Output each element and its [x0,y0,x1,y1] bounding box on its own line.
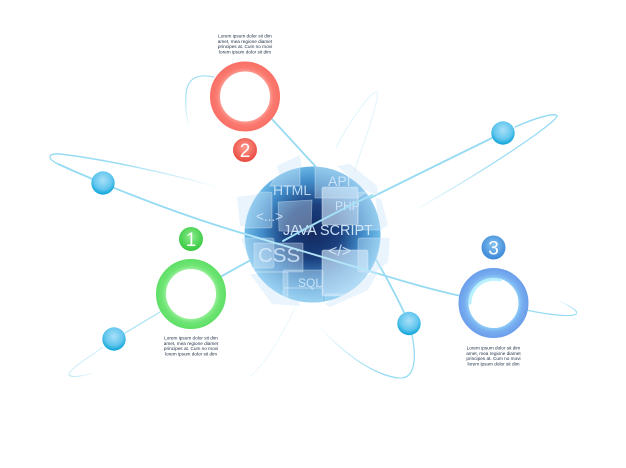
text block: 2: Lorem ipsum dolor sit dim [218,34,272,38]
badge: 2 [233,138,257,162]
text block: 3: amet, mea regione diamet [466,351,521,356]
orbit: faint upper ellipse [336,92,377,172]
text block: 2: lorem ipsum dolor sit dim [219,50,271,54]
globe sphere [244,166,380,302]
globe outer translucent shards [237,155,390,307]
orbit: left ellipse through globe to blue ring [50,154,577,316]
text block: 1: lorem ipsum dolor sit dim [165,352,217,356]
orbit: lines across globe front [245,195,375,273]
text block: 3 [466,346,521,366]
text block: 2: principes at. Cum no movi [218,44,272,49]
ring: green [161,264,221,324]
globe labels: SQL [298,276,322,290]
infographic [50,34,577,378]
orbit: faint lower ellipse [250,308,295,376]
globe [237,155,390,307]
text block: 1: Lorem ipsum dolor sit dim [164,336,218,340]
node: lower left [102,327,126,351]
globe labels: HTML [273,182,311,198]
globe labels: CSS [258,244,300,267]
globe labels: JAVA SCRIPT [283,223,373,239]
badge: 3: 3 [488,238,499,260]
badge: 3 [482,236,506,260]
text block: 3: principes at. Cum no movi [466,356,521,361]
ring: blue [464,273,524,333]
node: upper left [91,171,115,195]
text block: 3: lorem ipsum dolor sit dim [467,362,520,366]
text block: 2: amet, mea regione diamet [218,39,273,44]
text block: 3: Lorem ipsum dolor sit dim [467,346,520,350]
globe code tiles [244,166,380,302]
badge: 2: 2 [240,141,250,162]
ring: red [215,66,275,126]
node: upper right [491,121,515,145]
orbit: lower-left ellipse to upper-right node [69,115,557,376]
globe labels: PHP [335,199,360,213]
globe labels: <...> [256,209,283,224]
text block: 1: principes at. Cum no movi [164,346,218,351]
text block: 1: amet, mea regione diamet [164,341,219,346]
badge: 1 [179,227,203,251]
node: lower right [397,312,421,335]
globe labels: </> [328,243,351,260]
text block: 2 [218,34,273,54]
badge: 1: 1 [186,230,196,251]
orbit: red ring through globe to lower-right node [186,76,414,378]
text block: 1 [164,336,219,356]
globe labels [256,173,373,290]
globe labels: API [328,173,351,189]
